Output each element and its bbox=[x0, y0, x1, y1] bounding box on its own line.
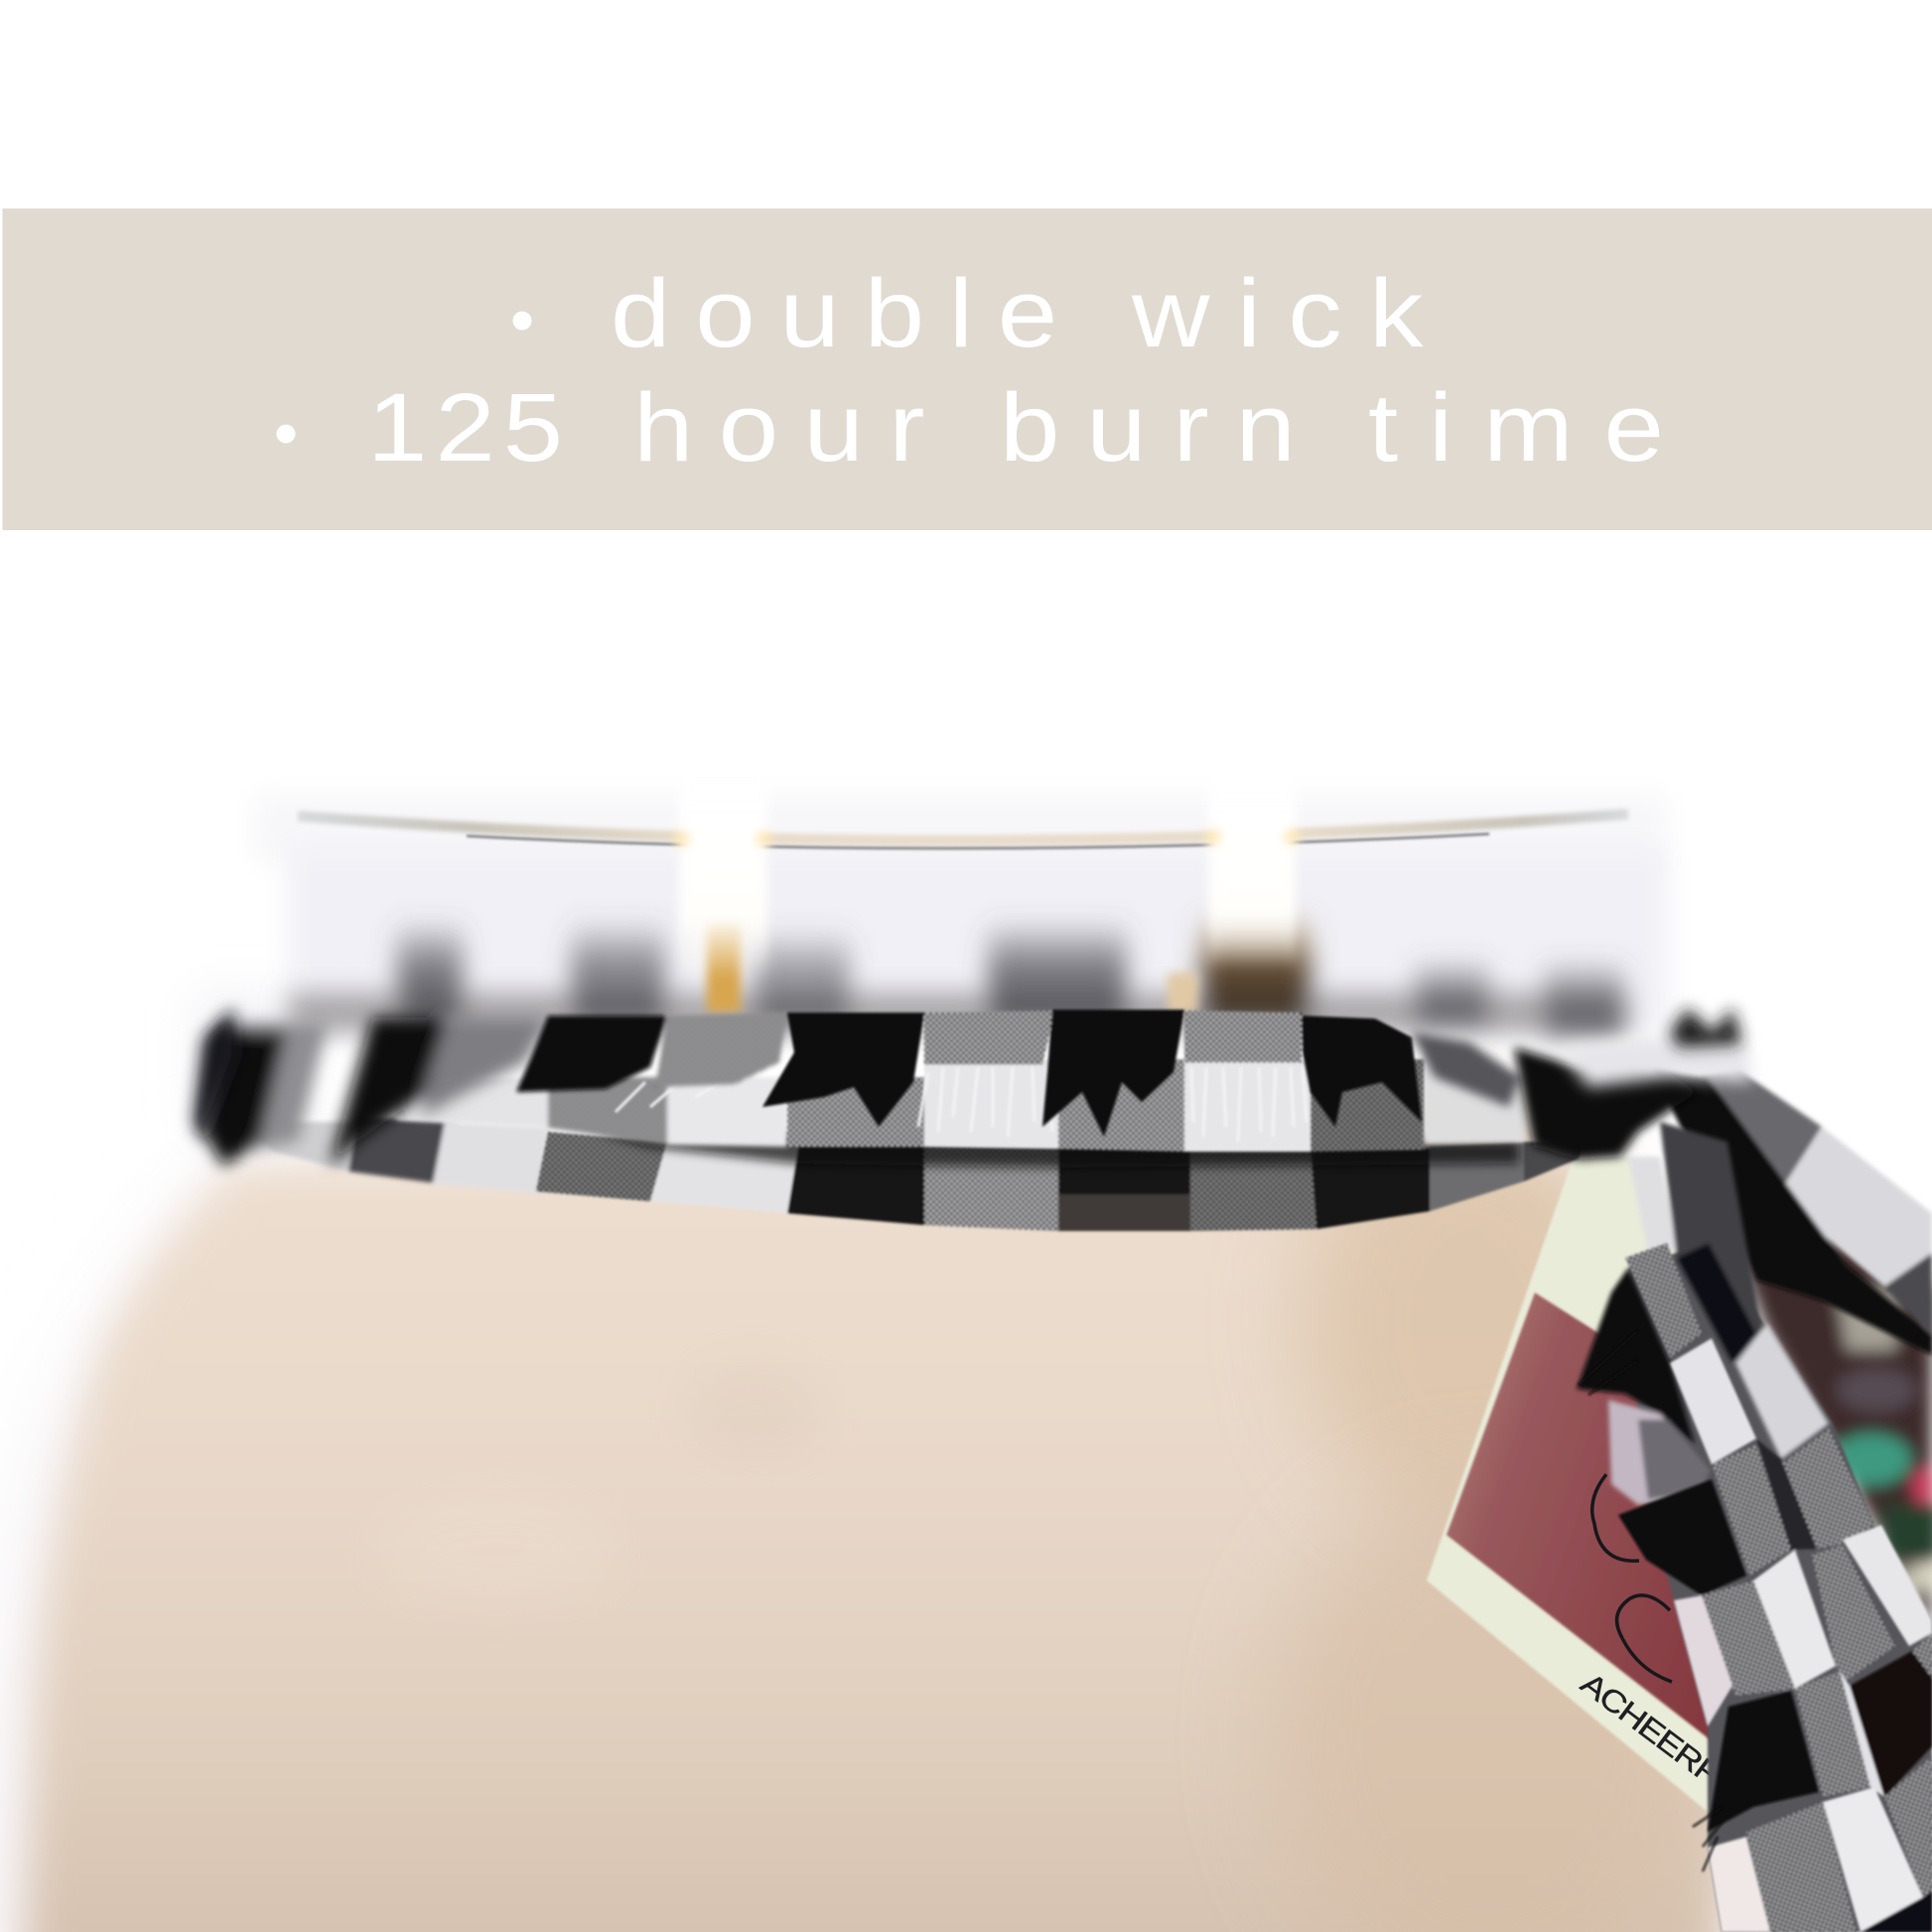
tag text: ACHEERF bbox=[1575, 1666, 1725, 1792]
flame glow right bbox=[1206, 774, 1299, 968]
tag card bbox=[1427, 1157, 1747, 1837]
candle photo bbox=[0, 774, 1932, 1932]
ribbon knot bbox=[1514, 1008, 1752, 1160]
text: 125 hour burn time: time bbox=[1368, 373, 1664, 482]
wax reflections behind glass bbox=[288, 918, 1628, 1037]
ribbon fringe threads bbox=[616, 1067, 1307, 1142]
ribbon lower layer bbox=[238, 1117, 1584, 1231]
ribbon frayed threads on tail bbox=[1579, 1330, 1723, 1871]
wax body bbox=[0, 1112, 1732, 1932]
text: double wick: double bbox=[611, 259, 1057, 367]
banner: candle features bbox=[2, 208, 1932, 530]
text: 125 hour burn time: burn bbox=[1000, 373, 1296, 482]
text: 125 hour burn time: 125 bbox=[367, 373, 563, 482]
tail underlay bbox=[1628, 1243, 1932, 1932]
ribbon shadow band bbox=[596, 1132, 1519, 1168]
ribbon upper row left blurred bbox=[204, 1018, 548, 1167]
glass jar rim bbox=[194, 794, 1668, 1142]
wick left bbox=[707, 918, 741, 1013]
ribbon tail hanging bbox=[1577, 1122, 1932, 1932]
text: double wick bbox=[611, 259, 1424, 367]
tag maroon panel bbox=[1447, 1293, 1767, 1777]
frayed fringe left end bbox=[194, 1008, 238, 1142]
text: 125 hour burn time bbox=[367, 373, 1664, 482]
text: 125 hour burn time: hour bbox=[633, 373, 924, 482]
text: double wick: wick bbox=[1131, 259, 1424, 367]
bullet: burn time: • bbox=[274, 394, 298, 472]
ribbon tail upper right bbox=[1652, 1069, 1932, 1355]
ribbon upper layer bbox=[204, 1010, 1524, 1167]
bullet: double wick: • bbox=[510, 281, 534, 358]
tag artwork behind ribbon tails bbox=[1688, 1122, 1932, 1628]
hang tag bbox=[1427, 1157, 1767, 1837]
flame glow left bbox=[675, 774, 770, 978]
tag heart outlines bbox=[1592, 1474, 1672, 1682]
wick right bbox=[1168, 973, 1197, 1013]
